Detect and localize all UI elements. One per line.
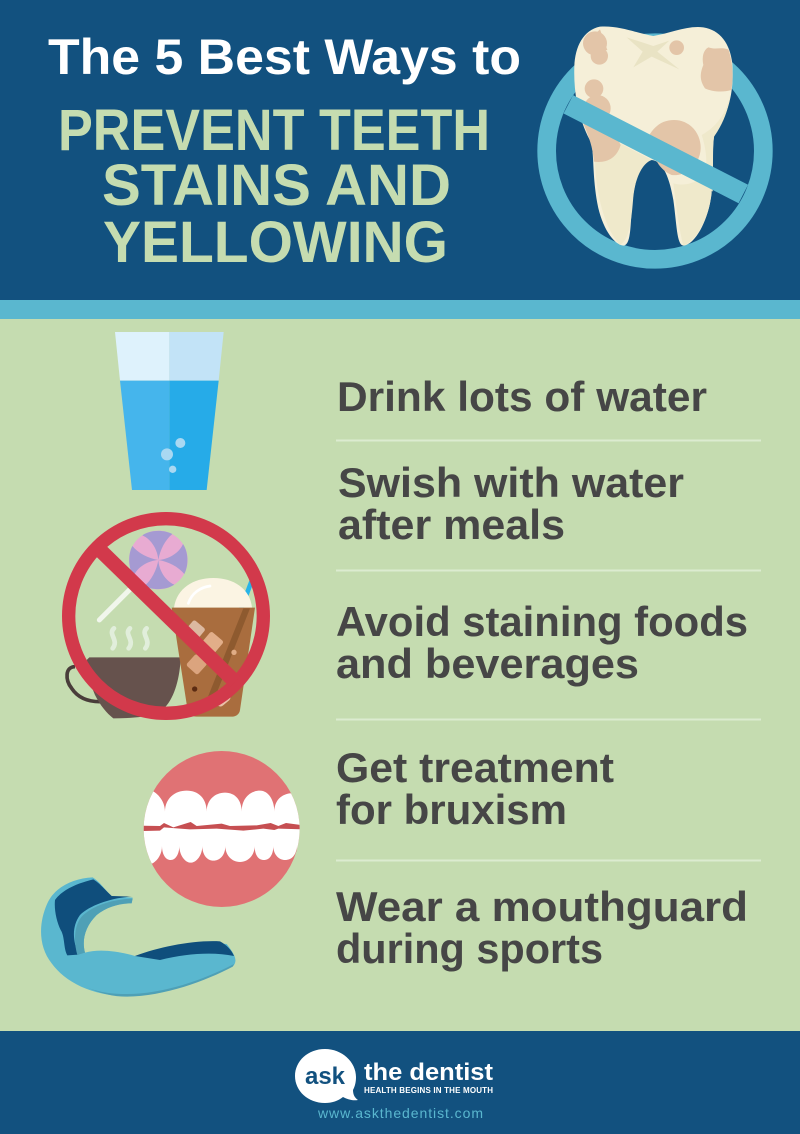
tip: mouthguard: during sports (336, 925, 603, 972)
logo: ask the dentist: ask (305, 1063, 346, 1090)
title: PREVENT TEETH (58, 98, 490, 163)
title: The 5 Best Ways to (48, 29, 521, 85)
title: YELLOWING (103, 210, 448, 275)
icon: mouthguard (41, 877, 235, 997)
tip: avoid staining foods: and beverages (336, 640, 639, 687)
panel: footer (0, 1031, 800, 1134)
tip: bruxism treatment: Get treatment (336, 744, 614, 791)
tip: mouthguard: Wear a mouthguard (336, 883, 748, 930)
tip: swish with water (338, 459, 684, 548)
icon: steam (112, 628, 147, 648)
tip: bruxism treatment: for bruxism (336, 786, 567, 833)
icon: iced coffee (172, 578, 255, 717)
tip: avoid staining foods (336, 598, 748, 687)
logo: ask the dentist: HEALTH BEGINS IN THE MOUTH (364, 1086, 493, 1095)
icon: glass of water (115, 332, 224, 490)
logo: ask the dentist (295, 1049, 493, 1103)
icon: coffee cup (67, 657, 181, 718)
website url: www.askthedentist.com (317, 1105, 483, 1121)
tip: swish with water: after meals (338, 501, 565, 548)
tip: swish with water: Swish with water (338, 459, 684, 506)
tip: bruxism treatment (336, 744, 614, 833)
logo: ask the dentist: the dentist (364, 1059, 493, 1086)
icon: clenched teeth (140, 751, 303, 907)
icon: stained tooth with prohibition sign (547, 27, 763, 259)
tip: mouthguard (336, 883, 748, 972)
icon: staining foods prohibited (67, 519, 263, 718)
title: STAINS AND (102, 153, 451, 218)
panel: header (0, 0, 800, 319)
title (48, 29, 521, 275)
tip list (336, 373, 761, 972)
tip: avoid staining foods: Avoid staining foods (336, 598, 748, 645)
icon: lollipop (99, 531, 188, 620)
tip: drink water: Drink lots of water (337, 373, 707, 420)
